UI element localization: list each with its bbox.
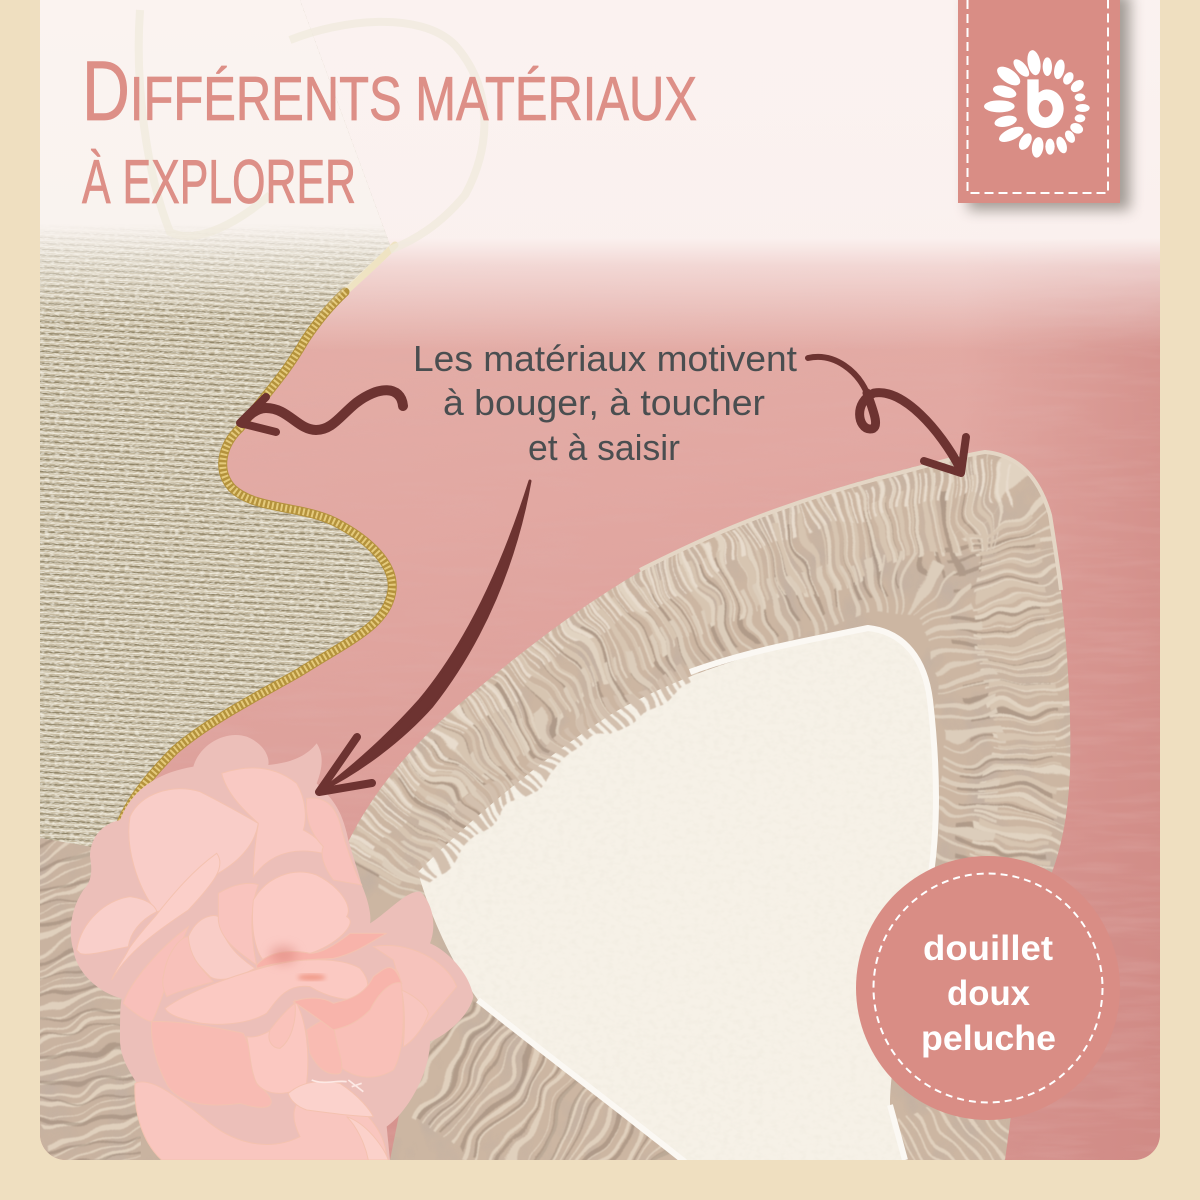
arrow: to silver fabric <box>240 390 403 432</box>
pink plush fabric <box>40 246 1160 1160</box>
fur overhanging the cream <box>420 675 690 872</box>
badge: douillet doux peluche <box>856 856 1120 1120</box>
silver glitter fabric <box>40 0 400 860</box>
beige fur left <box>40 838 161 1160</box>
text block: materials motivate <box>413 338 797 468</box>
arrow: to beige fur <box>808 357 966 473</box>
fade at the top of the plush <box>300 0 1160 338</box>
title: DIFFÉRENTS MATÉRIAUX <box>82 44 697 138</box>
gold embroidered edge <box>120 245 395 825</box>
translucent outer petals <box>71 735 473 1160</box>
arrow: to chiffon flower <box>319 481 530 792</box>
text block: materials motivate: à bouger, à toucher <box>443 382 765 423</box>
cream fleece <box>418 628 943 1162</box>
badge: douillet doux peluche: douillet <box>923 929 1053 968</box>
badge: douillet doux peluche: doux <box>947 974 1031 1013</box>
beige fur ear <box>340 450 1075 1180</box>
title <box>82 44 697 217</box>
pale embroidered loop <box>139 10 484 250</box>
petal shadow core <box>270 946 326 981</box>
pink chiffon flower <box>71 735 473 1160</box>
icon: flower logo with b <box>984 49 1090 158</box>
loose threads <box>312 1080 363 1092</box>
text block: materials motivate: Les matériaux motivent <box>413 338 797 379</box>
brand tag <box>958 0 1130 210</box>
title: À EXPLORER <box>82 148 356 217</box>
fade on the silver top <box>40 0 400 320</box>
inner petals <box>77 768 457 1160</box>
badge: douillet doux peluche: peluche <box>921 1019 1056 1058</box>
text block: materials motivate: et à saisir <box>528 427 680 468</box>
fur hairs <box>360 481 1040 1180</box>
